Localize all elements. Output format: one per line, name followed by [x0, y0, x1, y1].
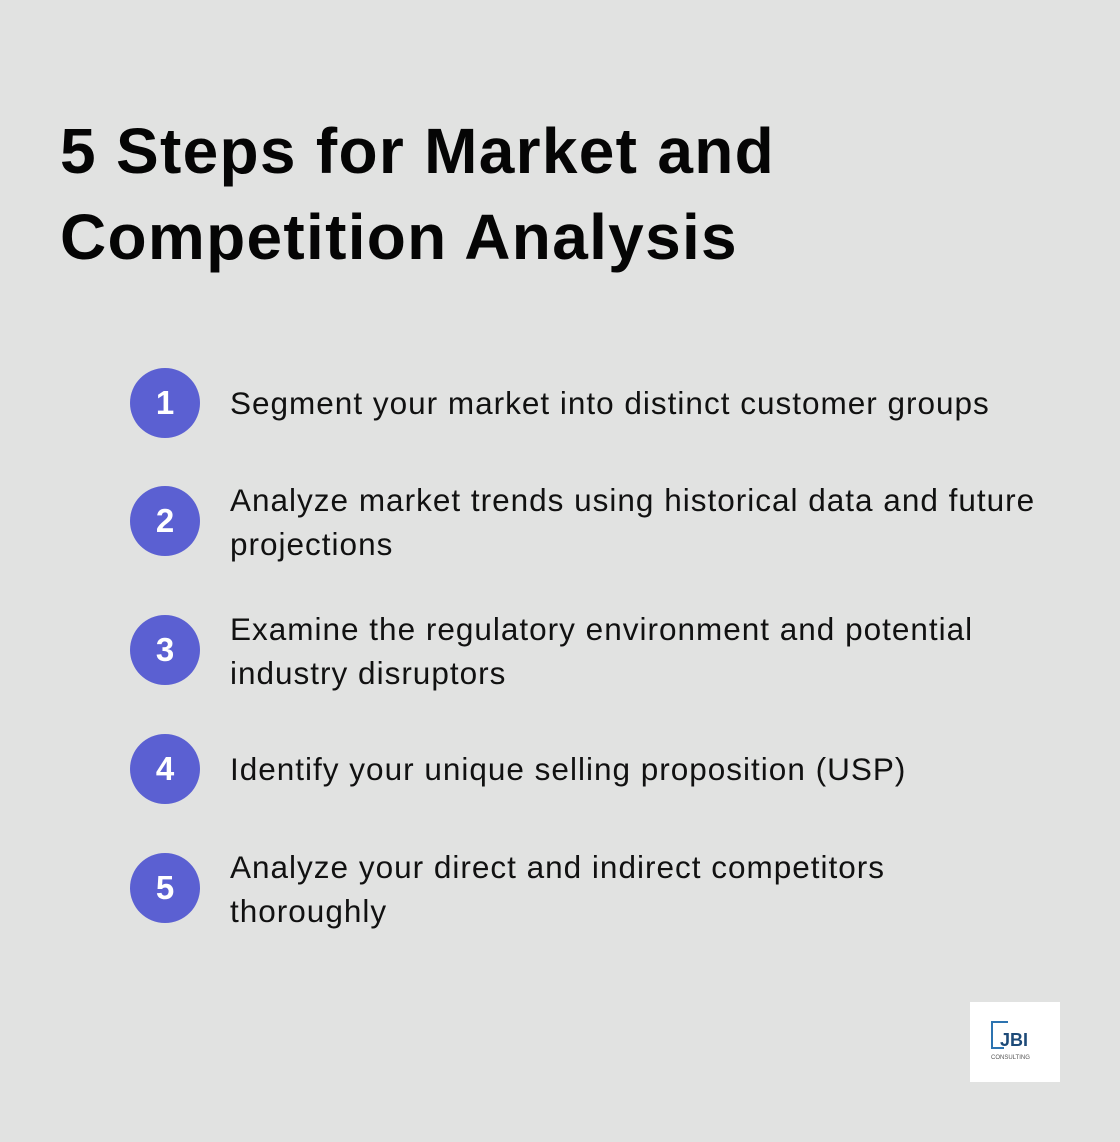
logo: JBI: [1000, 1030, 1028, 1050]
step 5: 5: [156, 869, 174, 906]
step 5: Analyze your direct and indirect competitors thoroughly: [230, 849, 885, 929]
step 3: 3: [156, 631, 174, 668]
title: 5 Steps for Market and: [60, 115, 775, 187]
step 4: [130, 734, 906, 804]
step 1: Segment your market into distinct customer groups: [230, 385, 990, 421]
step 4: 4: [156, 750, 174, 787]
step 2: Analyze market trends using historical data and future projections: [230, 482, 1035, 562]
step 1: [130, 368, 990, 438]
step 4: Identify your unique selling proposition (USP): [230, 751, 906, 787]
logo: [970, 1002, 1060, 1082]
title: Competition Analysis: [60, 201, 738, 273]
title: [60, 115, 775, 273]
step 3: Examine the regulatory environment and potential industry disruptors: [230, 611, 973, 691]
step 2: 2: [156, 502, 174, 539]
step 1: 1: [156, 384, 174, 421]
logo: CONSULTING: [991, 1055, 1030, 1061]
